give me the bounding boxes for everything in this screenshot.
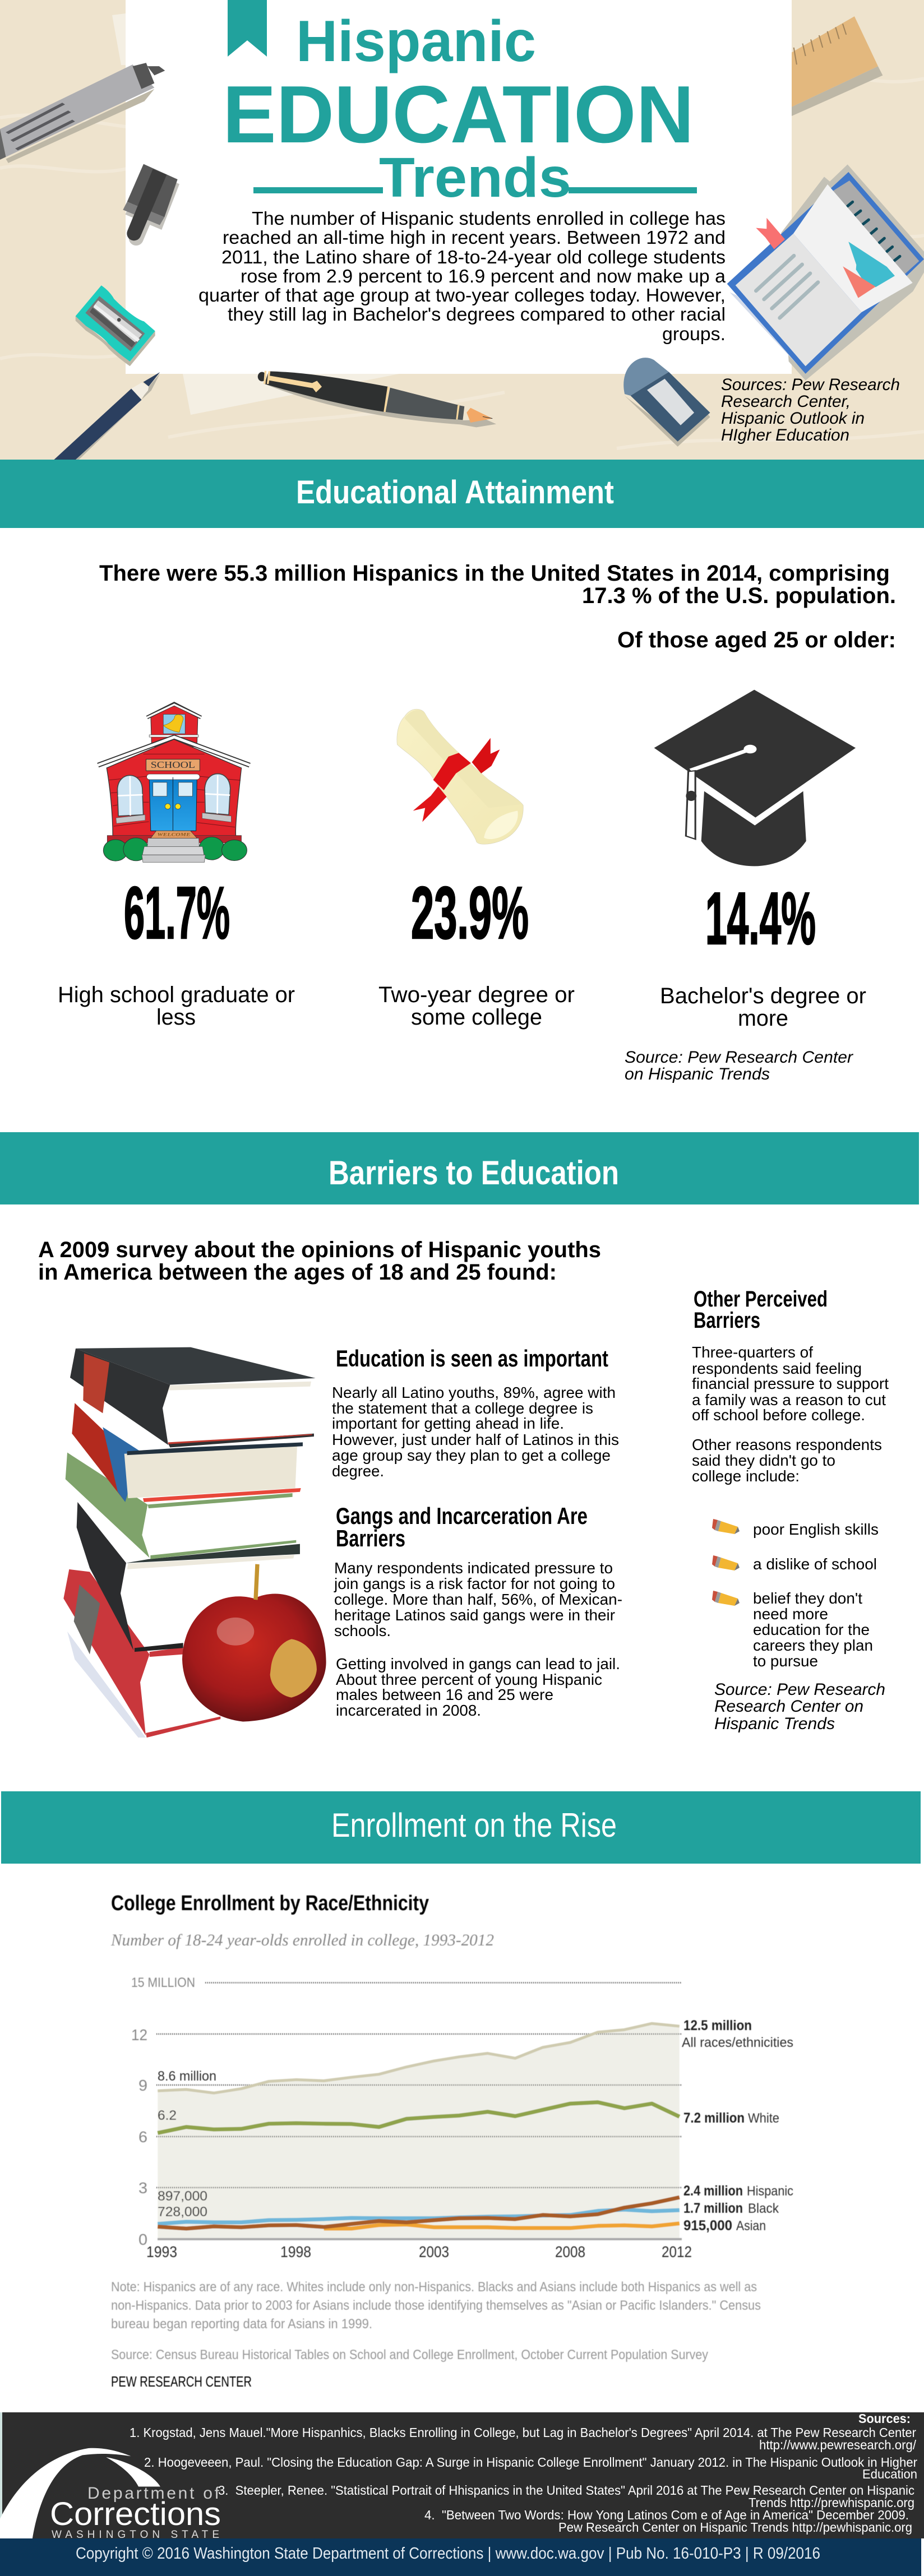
icon: paper sheets [112,13,399,415]
x axis labels: 2012 [662,2243,692,2260]
text block: population statement: Of those aged 25 or older: [617,628,896,652]
y axis labels: 9 [138,2077,147,2094]
stat: 14.4% bachelor's degree or more: more [738,1006,788,1031]
heading: Enrollment on the Rise band [1,1791,921,1864]
title: Hispanic [296,9,536,74]
end value labels: 2.4 million [683,2183,743,2199]
text block: gangs and incarceration: Many respondents indicated pressure to [334,1559,613,1577]
bullet: belief they don't need more education: education for the [753,1621,870,1638]
panel: header desk background [0,0,924,460]
panel: dark footer with sources [0,2411,924,2538]
heading: Enrollment on the Rise band: Enrollment on the Rise [331,1806,617,1844]
chart notes: bureau began reporting data for Asians in 1999. [111,2316,372,2332]
chart notes: non-Hispanics. Data prior to 2003 for Asians include those identifying themselves as "Asian or Pacific Islanders." Census [111,2298,761,2313]
text block: gangs and incarceration: Gangs and Incarceration Are [336,1503,588,1529]
text block: header sources: Research Center, [721,392,851,411]
panel: dark footer with sources: http://www.pewresearch.org/ [759,2438,917,2452]
end value labels: White [748,2111,779,2126]
stat: 23.9% two-year degree or some college: Two-year degree or [378,983,575,1007]
icon: schoolhouse: WELCOME [157,832,191,837]
text block: introduction: quarter of that age group at two-year colleges today. However, [198,285,726,306]
text block: education is seen as important: important for getting ahead in life. [332,1415,564,1432]
text block: gangs and incarceration: males between 16 and 25 were [336,1686,553,1703]
stat: 61.7% high school graduate or less: High school graduate or [58,983,295,1007]
grid lines [156,1983,682,2188]
dark book [77,1502,300,1652]
stat: 61.7% high school graduate or less: less [156,1005,196,1030]
text block: introduction: rose from 2.9 percent to 16.9 percent and now make up a [241,266,726,287]
text block: header sources: HIgher Education [721,426,849,444]
bullet: belief they don't need more education: belief they don't [753,1590,862,1607]
end value labels: 915,000 [683,2218,732,2234]
text block: education is seen as important: age group say they plan to get a college [332,1447,611,1464]
starting value labels: 728,000 [158,2204,207,2220]
text block: introduction [198,209,726,345]
panel: other perceived barriers: college include: [692,1467,800,1485]
y axis labels: 6 [138,2128,147,2146]
panel: other perceived barriers: Research Center on [714,1697,863,1716]
text block: education is seen as important: the statement that a college degree is [332,1400,593,1417]
chart notes: Source: Census Bureau Historical Tables on School and College Enrollment, October Current Population Survey [111,2347,708,2362]
logo: Department of Corrections [0,2448,221,2541]
bullet: belief they don't need more education [712,1590,873,1670]
text block: gangs and incarceration: About three percent of young Hispanic [336,1671,602,1688]
text block: education is seen as important: degree. [332,1462,384,1480]
stat: 23.9% two-year degree or some college [378,872,575,1030]
icon: graduation cap [654,690,856,866]
icon: eraser [623,358,710,447]
end value labels: Hispanic [747,2184,793,2199]
icon: schoolhouse: SCHOOL [151,759,195,770]
chart title: College Enrollment by Race/Ethnicity [111,1892,429,1915]
x axis labels: 1998 [280,2243,311,2260]
text block: gangs and incarceration [334,1503,622,1719]
text block: education is seen as important: However, just under half of Latinos in this [332,1431,619,1448]
chart: college enrollment by race/ethnicity [110,1892,793,2390]
stat: 14.4% bachelor's degree or more [660,877,866,1031]
panel: dark footer with sources: Sources: [858,2411,911,2426]
panel: other perceived barriers: respondents said feeling [692,1360,862,1377]
icon: diploma scroll [397,709,523,844]
axis baseline [158,2238,682,2240]
heading: Educational Attainment band: Educational Attainment [296,474,614,511]
panel: dark footer with sources: Pew Research Center on Hispanic Trends http://pewhispanic.org [558,2520,912,2535]
panel: other perceived barriers [692,1287,889,1733]
icon: bookmark ribbon [228,0,267,57]
text block: introduction: The number of Hispanic students enrolled in college has [252,209,726,229]
panel: other perceived barriers: Three-quarters of [692,1343,813,1361]
stat: 14.4% bachelor's degree or more: Bachelor's degree or [660,984,866,1008]
bullet: belief they don't need more education: need more [753,1605,828,1623]
icon: marker [0,63,165,163]
icon: open notebook [727,164,924,381]
title [223,9,697,209]
text block: gangs and incarceration: join gangs is a risk factor for not going to [334,1575,615,1592]
heading: Barriers to Education band: Barriers to Education [329,1154,619,1192]
panel: dark footer with sources: 2. Hoogeveeen, Paul. "Closing the Education Gap: A Surge in Hispanic College Enrollment" January 2012. in The Hispanic Outlook in Higher [144,2455,917,2470]
y axis labels [131,1975,195,2248]
panel: copyright bar [0,2538,921,2576]
panel: other perceived barriers: financial pressure to support [692,1375,889,1392]
apple [182,1564,326,1722]
text block: survey intro: A 2009 survey about the opinions of Hispanic youths [38,1238,601,1262]
text block: header sources [721,376,900,444]
panel: copyright bar: Copyright © 2016 Washington State Department of Corrections | www.doc.wa.gov | Pub No. 16-010-P3 | R 09/2016 [76,2545,820,2563]
data lines [158,2023,680,2228]
end value labels: 12.5 million [683,2018,752,2033]
text block: header sources: Sources: Pew Research [721,376,900,394]
top black book [70,1347,316,1447]
bullet: belief they don't need more education: careers they plan [753,1637,873,1654]
bullet: belief they don't need more education: to pursue [753,1652,818,1670]
end value labels: Black [748,2201,779,2216]
chart subtitle: Number of 18-24 year-olds enrolled in college, 1993-2012 [110,1931,494,1949]
text block: education is seen as important [332,1345,619,1480]
icon: schoolhouse [98,704,250,862]
chart notes: Note: Hispanics are of any race. Whites include only non-Hispanics. Blacks and Asians include both Hispanics as well as [111,2280,757,2295]
text block: gangs and incarceration: Barriers [336,1525,405,1551]
panel: other perceived barriers: Source: Pew Research [714,1680,885,1699]
text block: education is seen as important: Education is seen as important [336,1345,608,1372]
text block: introduction: reached an all-time high in recent years. Between 1972 and [223,228,726,248]
end value labels: 1.7 million [683,2200,743,2216]
bullet: a dislike of school: a dislike of school [753,1555,877,1573]
panel: other perceived barriers: Barriers [694,1308,760,1333]
x axis labels: 2008 [555,2243,585,2260]
y axis labels: 0 [138,2231,147,2248]
end value labels: Asian [736,2218,766,2234]
panel: other perceived barriers: Hispanic Trends [714,1715,835,1733]
red and blue book [72,1403,303,1502]
red bottom book [63,1569,220,1738]
text block: introduction: they still lag in Bachelor's degrees compared to other racial [228,304,726,325]
text block: introduction: 2011, the Latino share of 18-to-24-year old college students [221,247,726,268]
y axis labels: 12 [131,2026,147,2044]
text block: survey intro [38,1238,601,1285]
stat: 61.7% high school graduate or less [58,872,295,1030]
end value labels [682,2018,793,2234]
heading: Barriers to Education band [0,1132,919,1204]
text block: gangs and incarceration: heritage Latinos said gangs were in their [334,1606,615,1624]
text block: header sources: Hispanic Outlook in [721,409,865,428]
panel: other perceived barriers: Other Perceived [694,1287,828,1312]
panel: dark footer with sources: Trends http://prewhispanic.org [749,2495,914,2510]
x axis labels [146,2243,692,2260]
chart notes: PEW RESEARCH CENTER [111,2373,252,2390]
title: Trends [379,146,571,209]
y axis labels: 15 MILLION [131,1975,195,1990]
stat: 23.9% two-year degree or some college: 23.9% [411,872,529,954]
icon: fountain pen [258,371,496,427]
illustration: stack of books with apple [63,1347,326,1738]
bullet: poor English skills [712,1519,879,1538]
logo: Department of Corrections: Corrections [50,2496,221,2532]
text block: introduction: groups. [662,324,726,345]
x axis labels: 2003 [419,2243,449,2260]
text block: gangs and incarceration: Getting involved in gangs can lead to jail. [336,1655,620,1672]
x axis labels: 1993 [146,2243,177,2260]
text block: attainment source: Source: Pew Research Center [625,1048,853,1067]
panel: other perceived barriers: off school before college. [692,1406,865,1424]
panel: dark footer with sources: 4. "Between Two Words: How Yong Latinos Com e of Age in America" December 2009. [424,2508,909,2522]
end value labels: All races/ethnicities [682,2035,793,2050]
panel: white title card [126,0,792,374]
panel: other perceived barriers: a family was a reason to cut [692,1391,886,1409]
starting value labels: 6.2 [158,2108,177,2123]
text block: population statement [99,561,896,652]
bullet: poor English skills: poor English skills [753,1521,879,1538]
panel: dark footer with sources: Education [862,2467,917,2481]
starting value labels: 897,000 [158,2189,207,2204]
text block: education is seen as important: Nearly all Latino youths, 89%, agree with [332,1384,616,1401]
heading: Educational Attainment band [0,460,924,528]
y axis labels: 3 [138,2179,147,2197]
text block: gangs and incarceration: schools. [334,1622,391,1639]
text block: gangs and incarceration: college. More than half, 56%, of Mexican- [334,1591,622,1608]
icon: pencil [54,372,160,460]
text block: attainment source: on Hispanic Trends [625,1065,770,1083]
chart area fill [158,2023,680,2240]
starting value labels: 8.6 million [158,2069,216,2084]
end value labels: 7.2 million [683,2110,745,2126]
icon: glue stick [123,164,179,245]
stat: 61.7% high school graduate or less: 61.7% [124,872,230,954]
stat: 23.9% two-year degree or some college: some college [411,1005,542,1030]
text block: population statement: There were 55.3 million Hispanics in the United States in 2014, comprising [99,561,890,586]
logo: Department of Corrections: Department of [87,2484,220,2503]
starting value labels [158,2069,216,2220]
panel: other perceived barriers: said they didn't go to [692,1452,835,1469]
green book [66,1453,296,1559]
stat: 14.4% bachelor's degree or more: 14.4% [705,877,816,960]
logo: Department of Corrections: WASHINGTON STATE [52,2529,219,2541]
text block: survey intro: in America between the ages of 18 and 25 found: [38,1260,557,1285]
title: EDUCATION [223,69,694,160]
panel: dark footer with sources: 3. Steepler, Renee. "Statistical Portrait of Hhispanics in the United States" April 2016 at The Pew Research Center on Hispanic [218,2483,914,2498]
chart notes [111,2280,761,2390]
text block: attainment source [625,1048,853,1083]
icon: ruler [791,16,883,116]
text block: gangs and incarceration: incarcerated in 2008. [336,1702,481,1719]
panel: other perceived barriers: Other reasons respondents [692,1436,882,1453]
text block: population statement: 17.3 % of the U.S. population. [582,583,896,608]
icon: pencil sharpener [76,285,155,366]
